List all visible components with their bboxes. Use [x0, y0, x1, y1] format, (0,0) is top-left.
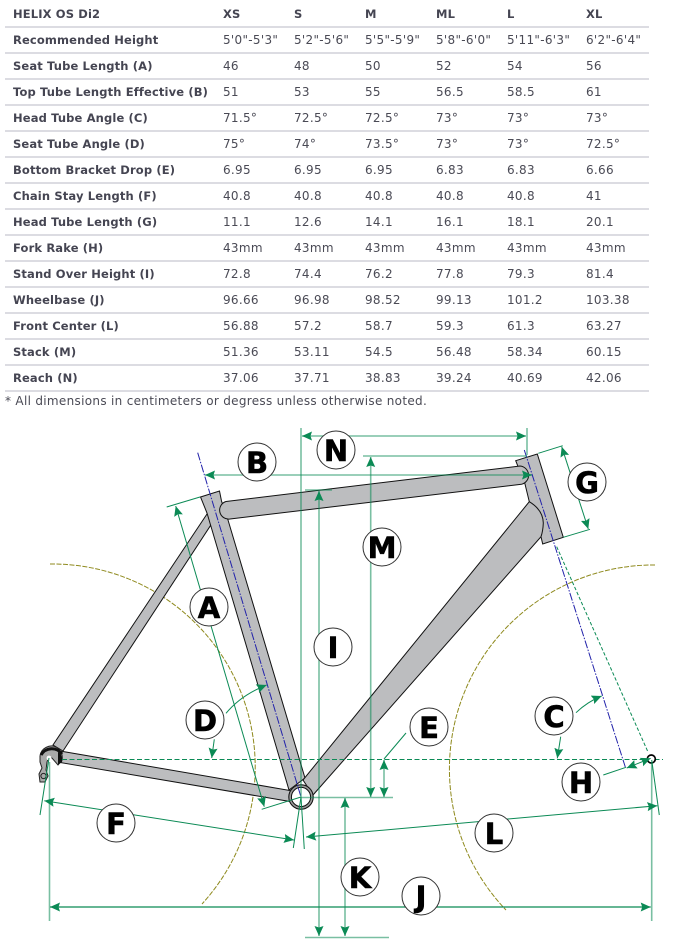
geometry table: 43mm: [586, 241, 626, 255]
geometry table: 5'2"-5'6": [294, 33, 349, 47]
label circle J: J: [414, 880, 426, 914]
chain stay: [60, 751, 290, 802]
rear wheel arc: [50, 564, 255, 904]
geometry table: Head Tube Angle (C): [13, 111, 148, 125]
geometry table: [5, 7, 649, 392]
geometry table: 56.48: [436, 345, 472, 359]
geometry table: 14.1: [365, 215, 393, 229]
geometry table: 72.5°: [586, 137, 620, 151]
dimension N: [301, 428, 527, 797]
geometry table: Wheelbase (J): [13, 293, 105, 307]
label circle C: C: [543, 700, 565, 734]
geometry table: 42.06: [586, 371, 622, 385]
label circle J: [402, 877, 440, 915]
geometry table: 37.71: [294, 371, 330, 385]
footnote: * All dimensions in centimeters or degress unless otherwise noted.: [5, 394, 427, 408]
fork dashed line: [557, 547, 648, 752]
geometry table: 72.8: [223, 267, 251, 281]
geometry table: HELIX OS Di2: [13, 7, 100, 21]
label circle F: F: [106, 807, 126, 841]
geometry table: Stand Over Height (I): [13, 267, 155, 281]
label circle C: [535, 697, 573, 735]
geometry table: 73°: [586, 111, 608, 125]
dimension I: [305, 490, 389, 938]
geometry table: 5'8"-6'0": [436, 33, 491, 47]
geometry table: 6.95: [365, 163, 393, 177]
geometry table: 40.8: [436, 189, 464, 203]
geometry table: 53: [294, 85, 310, 99]
geometry table: 40.8: [507, 189, 535, 203]
geometry table: 60.15: [586, 345, 622, 359]
geometry table: 6.95: [294, 163, 322, 177]
geometry table: L: [507, 7, 514, 21]
geometry table: 57.2: [294, 319, 322, 333]
geometry table: XS: [223, 7, 240, 21]
label circle I: [314, 628, 352, 666]
geometry table: 6.83: [436, 163, 464, 177]
geometry table: 72.5°: [294, 111, 328, 125]
label circle K: [341, 858, 379, 896]
dimension G: [538, 446, 590, 537]
geometry table: 56: [586, 59, 602, 73]
geometry table: 71.5°: [223, 111, 257, 125]
label circle G: G: [575, 466, 599, 500]
angle D leaders: [212, 685, 267, 758]
geometry table: 5'11"-6'3": [507, 33, 570, 47]
geometry table: 6'2"-6'4": [586, 33, 641, 47]
geometry table: M: [365, 7, 377, 21]
geometry table: 12.6: [294, 215, 322, 229]
geometry table: 59.3: [436, 319, 464, 333]
down tube: [303, 502, 543, 795]
dimension M: [363, 456, 527, 797]
label circle E: [410, 708, 448, 746]
geometry table: 52: [436, 59, 452, 73]
geometry table: 58.7: [365, 319, 393, 333]
geometry table: 73°: [436, 137, 458, 151]
geometry table: 79.3: [507, 267, 535, 281]
dimension A: [167, 497, 301, 809]
label circle A: A: [198, 591, 221, 625]
geometry table: 73°: [507, 111, 529, 125]
geometry table: 18.1: [507, 215, 535, 229]
geometry table: 73°: [436, 111, 458, 125]
geometry table: 58.34: [507, 345, 543, 359]
geometry table: 16.1: [436, 215, 464, 229]
geometry table: ML: [436, 7, 455, 21]
bike frame: [39, 454, 563, 809]
geometry table: 43mm: [436, 241, 476, 255]
dimension B: [205, 474, 532, 476]
label circle L: L: [485, 817, 503, 851]
geometry table: Front Center (L): [13, 319, 119, 333]
geometry table: 99.13: [436, 293, 472, 307]
geometry table: 96.98: [294, 293, 330, 307]
geometry table: 43mm: [223, 241, 263, 255]
label circle H: [562, 763, 600, 801]
geometry table: 46: [223, 59, 239, 73]
geometry table: 6.83: [507, 163, 535, 177]
label circle B: [238, 443, 276, 481]
dimension F: [40, 758, 301, 848]
geometry table: Seat Tube Angle (D): [13, 137, 145, 151]
geometry table: 11.1: [223, 215, 251, 229]
geometry table: 6.66: [586, 163, 614, 177]
geometry table: 58.5: [507, 85, 535, 99]
geometry table: Fork Rake (H): [13, 241, 103, 255]
label circle E: E: [419, 711, 439, 745]
geometry table: Top Tube Length Effective (B): [13, 85, 208, 99]
geometry table: 103.38: [586, 293, 630, 307]
label circle N: N: [324, 434, 348, 468]
geometry table: 96.66: [223, 293, 259, 307]
label circle L: [475, 814, 513, 852]
label circle B: B: [246, 446, 268, 480]
top tube: [220, 466, 529, 519]
dimension K: [344, 798, 346, 936]
seat tube centre line: [198, 453, 301, 797]
front wheel arc: [449, 565, 655, 910]
geometry table: 74.4: [294, 267, 322, 281]
front axle: [647, 755, 655, 763]
geometry table: 73.5°: [365, 137, 399, 151]
angle C leaders: [557, 696, 602, 758]
geometry table: 56.88: [223, 319, 259, 333]
label circle H: H: [569, 766, 593, 800]
geometry table: Bottom Bracket Drop (E): [13, 163, 175, 177]
geometry table: 50: [365, 59, 381, 73]
seat stay: [53, 514, 212, 751]
geometry table: 61.3: [507, 319, 535, 333]
label circle D: D: [193, 704, 217, 738]
horizontal axle dashed line: [62, 758, 663, 760]
geometry table: 5'0"-5'3": [223, 33, 278, 47]
geometry table: 54.5: [365, 345, 393, 359]
geometry table: 77.8: [436, 267, 464, 281]
geometry table: 101.2: [507, 293, 543, 307]
geometry table: 51: [223, 85, 239, 99]
label circle A: [190, 588, 228, 626]
geometry table: 6.95: [223, 163, 251, 177]
geometry table: 54: [507, 59, 523, 73]
geometry table: 43mm: [365, 241, 405, 255]
rear dropout: [39, 746, 62, 782]
geometry table: Recommended Height: [13, 33, 158, 47]
geometry table: Head Tube Length (G): [13, 215, 157, 229]
label circle K: K: [349, 861, 373, 895]
geometry table: 56.5: [436, 85, 464, 99]
geometry table: 5'5"-5'9": [365, 33, 420, 47]
geometry table: 53.11: [294, 345, 330, 359]
geometry table: 63.27: [586, 319, 622, 333]
geometry table: 48: [294, 59, 310, 73]
label circle N: [317, 431, 355, 469]
geometry table: 41: [586, 189, 602, 203]
geometry table: 37.06: [223, 371, 259, 385]
geometry table: 98.52: [365, 293, 401, 307]
fork rake H leader: [603, 758, 651, 775]
geometry table: S: [294, 7, 302, 21]
geometry table: 43mm: [294, 241, 334, 255]
geometry table: 40.8: [365, 189, 393, 203]
geometry table: 20.1: [586, 215, 614, 229]
geometry table: 40.69: [507, 371, 543, 385]
geometry table: 55: [365, 85, 381, 99]
geometry table: Seat Tube Length (A): [13, 59, 153, 73]
geometry table: 74°: [294, 137, 316, 151]
geometry table: 72.5°: [365, 111, 399, 125]
geometry table: Stack (M): [13, 345, 76, 359]
geometry table: 73°: [507, 137, 529, 151]
geometry table: 61: [586, 85, 602, 99]
geometry table: 51.36: [223, 345, 259, 359]
label circle I: I: [328, 631, 338, 665]
geometry table: 76.2: [365, 267, 393, 281]
geometry table: 75°: [223, 137, 245, 151]
seat tube: [200, 491, 305, 790]
head tube: [516, 454, 563, 544]
dimension J: [50, 762, 652, 921]
geometry table: XL: [586, 7, 602, 21]
geometry table: 40.8: [223, 189, 251, 203]
geometry table: 40.8: [294, 189, 322, 203]
bottom bracket: [289, 785, 313, 809]
label circle M: M: [368, 531, 396, 565]
geometry table: Chain Stay Length (F): [13, 189, 157, 203]
geometry table: 81.4: [586, 267, 614, 281]
dimension L: [301, 760, 659, 849]
geometry table: 43mm: [507, 241, 547, 255]
steering axis centre line: [524, 450, 625, 767]
label circle M: [363, 528, 401, 566]
geometry table: Reach (N): [13, 371, 78, 385]
label circle D: [186, 701, 224, 739]
label circle F: [97, 804, 135, 842]
label circle G: [568, 463, 606, 501]
geometry table: 38.83: [365, 371, 401, 385]
geometry table: 39.24: [436, 371, 472, 385]
dimension E: [301, 733, 406, 798]
